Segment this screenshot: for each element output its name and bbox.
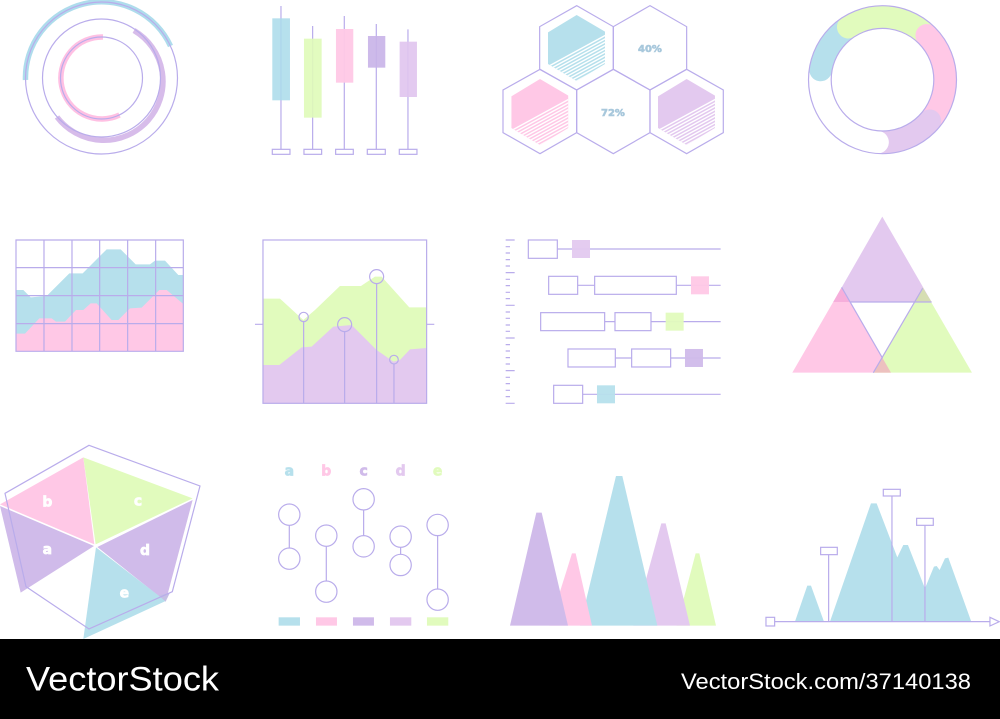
panel: pentagon sector chart: b xyxy=(42,495,52,511)
panel: lollipop range chart with legend xyxy=(279,463,448,626)
panel: pentagon sector chart: c xyxy=(134,493,142,509)
panel: gantt style timeline xyxy=(506,240,721,403)
panel: candlestick chart xyxy=(272,6,417,154)
panel: hexagon percentage chart: 40% xyxy=(638,44,662,55)
panel: concentric ring chart xyxy=(25,2,178,154)
panel: overlapping triangles xyxy=(792,217,972,373)
panel: pentagon sector chart: a xyxy=(43,542,52,558)
panel: area chart with markers xyxy=(255,240,434,403)
panel: pentagon sector chart xyxy=(0,445,200,639)
panel: lollipop range chart with legend: c xyxy=(359,463,368,479)
panel: pentagon sector chart: e xyxy=(120,586,129,602)
panel: hexagon percentage chart: 72% xyxy=(601,108,625,119)
panel: pentagon sector chart: d xyxy=(140,543,150,559)
panel: lollipop range chart with legend: a xyxy=(285,463,294,479)
panel: hexagon percentage chart xyxy=(503,6,723,161)
panel: lollipop range chart with legend: d xyxy=(396,463,406,479)
panel: overlapping peak chart xyxy=(510,476,716,626)
panel: stacked area chart with grid xyxy=(16,240,183,351)
footer bar: VectorStock.com/37140138 xyxy=(681,669,971,694)
panel: segmented donut chart xyxy=(808,6,956,154)
panel: lollipop range chart with legend: b xyxy=(321,463,331,479)
panel: lollipop range chart with legend: e xyxy=(433,463,442,479)
panel: distribution chart on axis xyxy=(766,489,999,626)
footer bar: VectorStock xyxy=(26,660,220,698)
footer bar xyxy=(0,639,1000,719)
